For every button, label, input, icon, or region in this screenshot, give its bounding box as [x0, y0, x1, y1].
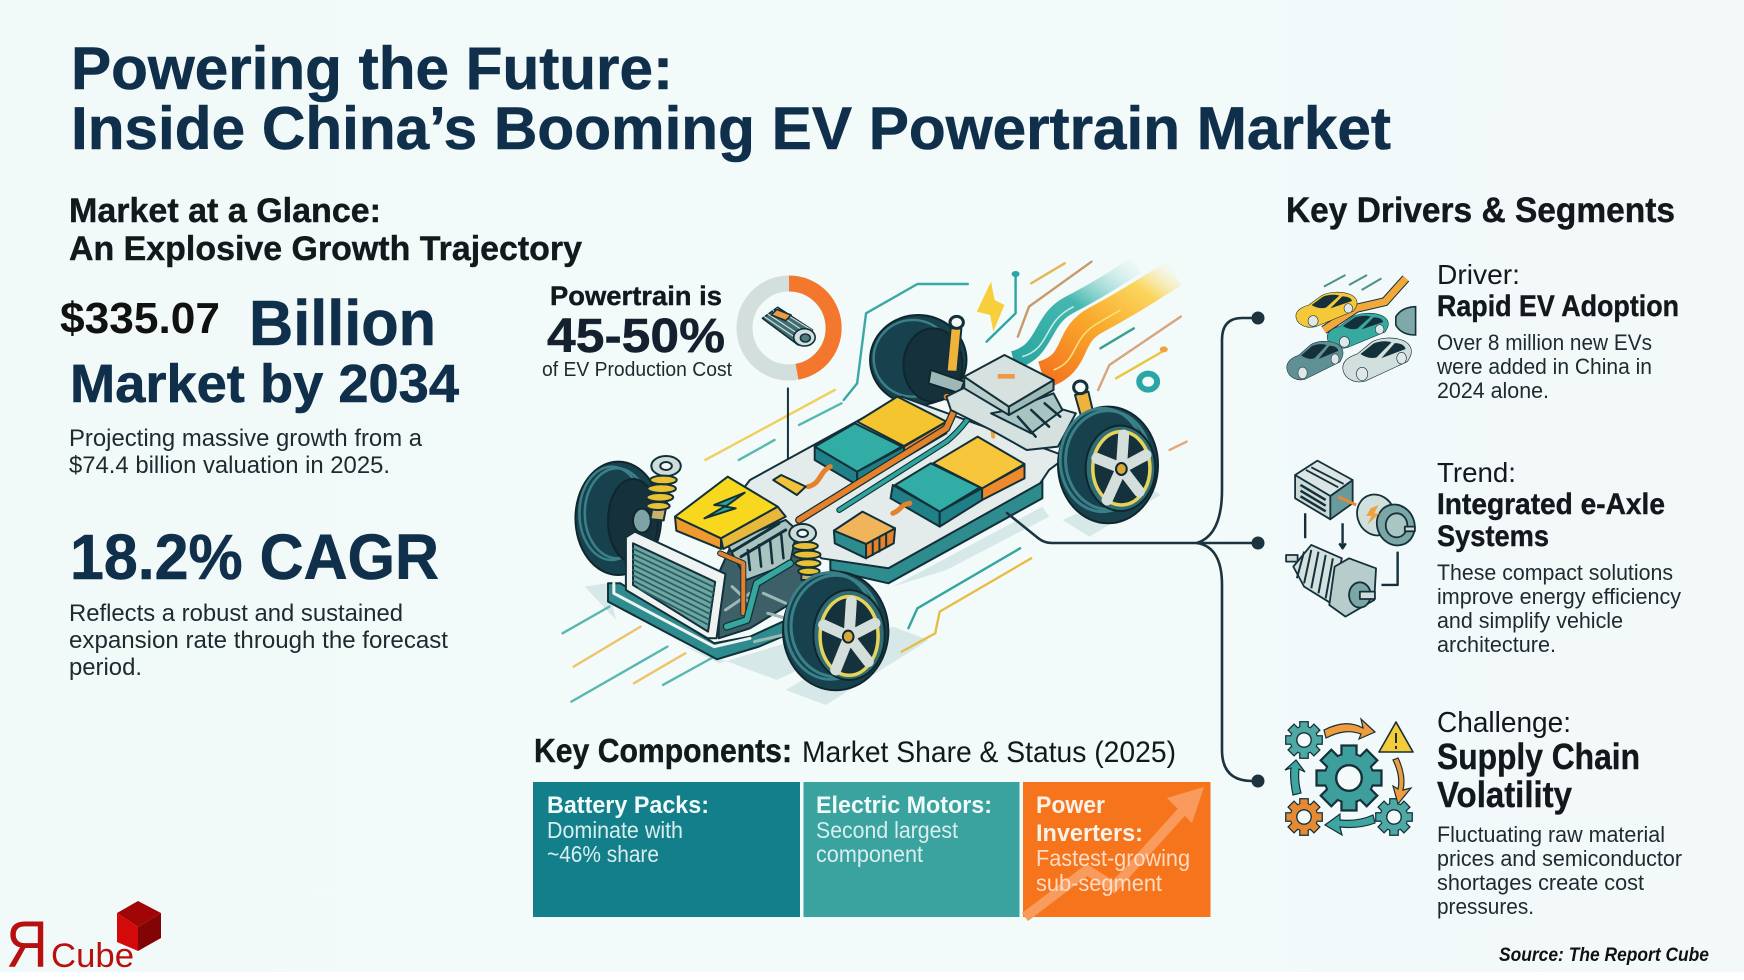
text: CAGR note: period. — [69, 654, 142, 681]
block: challenge: Challenge: — [1437, 707, 1571, 739]
callout: powertrain cost share: of EV Production Cost — [542, 359, 732, 381]
coolant and power tubes — [720, 553, 790, 627]
stat: market value: Billion — [249, 287, 436, 359]
logo: RCube: Cube — [51, 937, 134, 975]
chassis lip — [614, 583, 750, 647]
panel: market at a glance — [60, 192, 582, 681]
logo: RCube — [6, 901, 161, 980]
text: projection note — [69, 425, 423, 479]
card: electric motors: component — [816, 841, 924, 867]
connector lines — [1007, 312, 1264, 788]
block: trend: Systems — [1437, 520, 1549, 553]
heading: market at a glance: Market at a Glance: — [69, 192, 381, 230]
block: challenge: shortages create cost — [1437, 870, 1644, 895]
stat: CAGR: 18.2% CAGR — [70, 521, 439, 593]
block: trend: Trend: — [1437, 457, 1516, 488]
block: challenge: pressures. — [1437, 894, 1534, 919]
icon: supply chain gears — [1285, 719, 1413, 836]
card: battery packs: Dominate with — [547, 817, 683, 843]
card: power inverters: sub-segment — [1036, 870, 1163, 896]
callout: powertrain cost share: Powertrain is — [550, 281, 722, 311]
block: trend — [1437, 457, 1681, 657]
card: electric motors: Electric Motors: — [816, 792, 992, 819]
text: CAGR note: Reflects a robust and sustained — [69, 600, 403, 627]
heading: key components — [534, 732, 1176, 769]
donut chart: 45-50% — [744, 283, 834, 372]
chassis floor — [732, 397, 1067, 568]
growth arrow — [1025, 787, 1204, 917]
card: power inverters — [1023, 782, 1210, 917]
icon: motor in donut — [762, 307, 815, 346]
block: challenge — [1437, 707, 1682, 919]
ground shadows — [585, 483, 1161, 705]
flow ribbons — [1013, 265, 1174, 375]
wheel: front left — [783, 572, 888, 690]
chassis side rail — [830, 480, 1042, 583]
wheel: front right — [1058, 407, 1158, 523]
battery pack: upper — [815, 397, 946, 485]
cables: bus bars — [799, 397, 1004, 520]
heading: market at a glance: An Explosive Growth Trajectory — [69, 230, 582, 268]
small junction box — [834, 512, 895, 558]
battery pack: lower — [891, 437, 1025, 527]
small yellow cylinder — [773, 475, 806, 495]
heading: key components: Market Share & Status (2025) — [802, 736, 1176, 769]
text: CAGR note: expansion rate through the forecast — [69, 627, 448, 654]
wheel: rear left — [575, 462, 661, 575]
heading: market at a glance — [69, 192, 582, 268]
stat: market value — [60, 287, 459, 414]
block: trend: These compact solutions — [1437, 560, 1673, 585]
title — [71, 35, 1391, 162]
text: CAGR note — [69, 600, 448, 681]
title: Powering the Future: — [71, 35, 673, 102]
block: challenge: Fluctuating raw material — [1437, 822, 1665, 847]
block: challenge: prices and semiconductor — [1437, 846, 1682, 871]
block: driver — [1436, 259, 1679, 403]
stat: market value: $335.07 — [60, 294, 220, 343]
stat: market value: Market by 2034 — [70, 354, 459, 414]
heading: key drivers and segments: Key Drivers & Segments — [1286, 191, 1675, 230]
card: electric motors — [804, 782, 1020, 917]
block: driver: 2024 alone. — [1437, 378, 1549, 403]
block: challenge: Supply Chain — [1437, 736, 1640, 777]
icon: EV cars — [1287, 275, 1416, 382]
heading: key components: Key Components: — [534, 732, 792, 769]
icon: e-axle components — [1286, 461, 1420, 617]
callout leader line — [787, 388, 789, 463]
card: battery packs: Battery Packs: — [547, 792, 709, 819]
speed lines — [562, 262, 1187, 702]
card: electric motors: Second largest — [816, 817, 959, 843]
card: battery packs — [533, 782, 800, 917]
radiator — [626, 532, 725, 638]
block: challenge: Volatility — [1437, 774, 1572, 815]
callout: powertrain cost share: 45-50% — [547, 310, 725, 363]
callout: powertrain cost share — [542, 281, 732, 381]
source note: Source: The Report Cube — [1499, 945, 1709, 966]
block: trend: architecture. — [1437, 632, 1556, 657]
block: trend: Integrated e-Axle — [1437, 488, 1665, 521]
text: projection note: Projecting massive growth from a — [69, 425, 423, 452]
card: power inverters: Fastest-growing — [1036, 845, 1190, 871]
card: power inverters: Power — [1036, 792, 1105, 819]
front drive unit — [675, 477, 812, 642]
wheel: rear right — [870, 315, 966, 405]
logo: RCube: Я — [6, 907, 48, 980]
illustration: EV chassis — [562, 262, 1187, 705]
block: driver: Over 8 million new EVs — [1437, 330, 1652, 355]
icon: lightning bolt — [977, 282, 1004, 332]
rear motor block — [946, 355, 1076, 450]
icon: small gear — [1012, 271, 1168, 390]
block: trend: and simplify vehicle — [1437, 608, 1623, 633]
card: battery packs: ~46% share — [547, 841, 659, 867]
card: power inverters: Inverters: — [1036, 820, 1143, 847]
block: driver: Driver: — [1437, 259, 1520, 290]
shock absorbers — [646, 316, 1095, 580]
title: Inside China’s Booming EV Powertrain Market — [71, 95, 1391, 162]
chassis front frame — [608, 583, 790, 659]
block: driver: Rapid EV Adoption — [1437, 290, 1679, 323]
block: driver: were added in China in — [1436, 354, 1652, 379]
block: trend: improve energy efficiency — [1437, 584, 1681, 609]
text: projection note: $74.4 billion valuation in 2025. — [69, 452, 390, 479]
